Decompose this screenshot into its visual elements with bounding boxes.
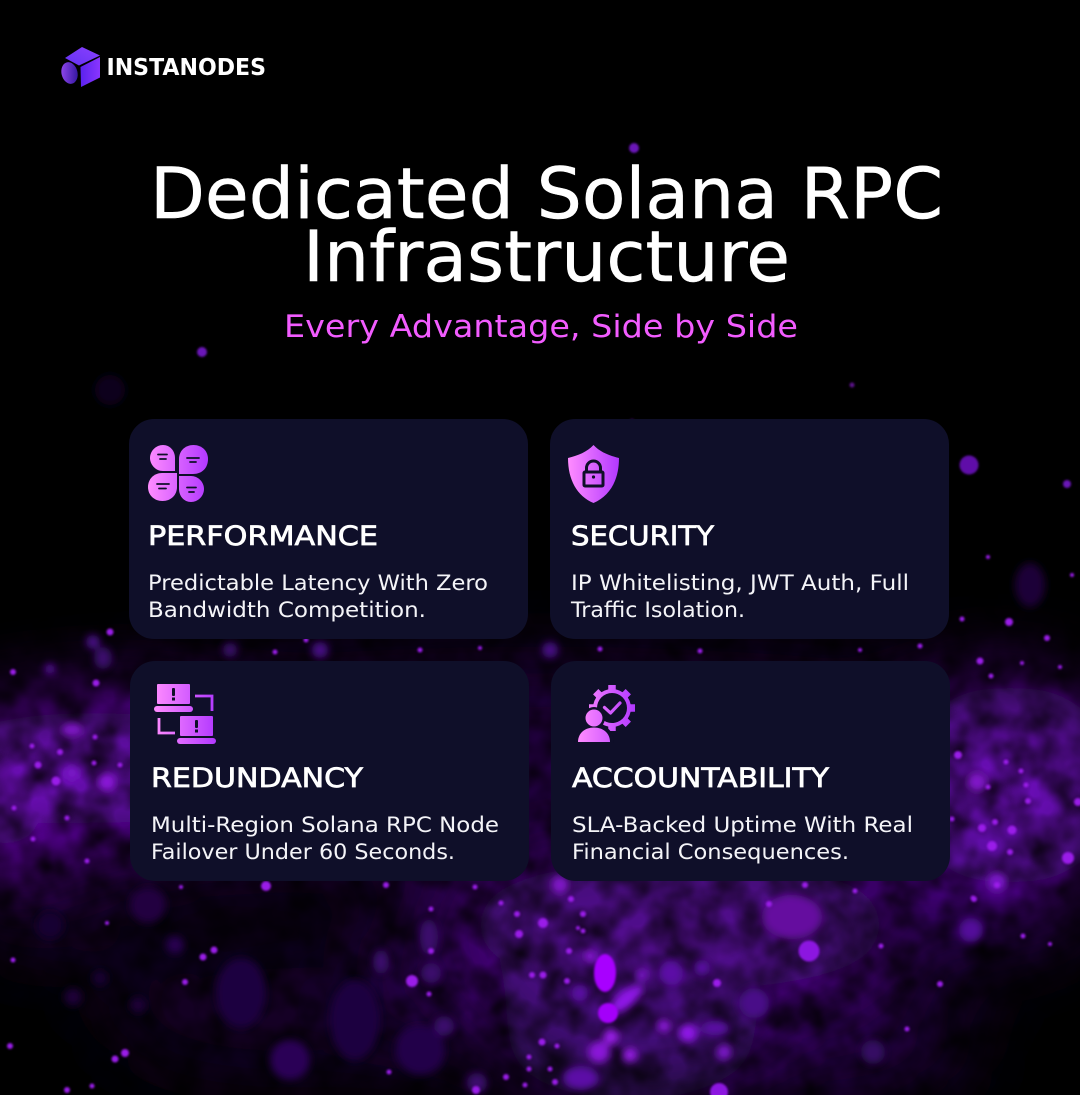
icon: shield with padlock [568,445,619,503]
icon: cube [59,47,100,87]
logo wordmark: INSTANODES [106,55,266,81]
title [150,153,943,298]
panel: performance [129,419,528,639]
small particles [7,382,1080,1094]
logo: Instanodes [59,47,266,87]
text: performance description: Predictable Latency With Zero [148,571,488,595]
text: redundancy description [151,813,499,864]
text: security description: Traffic Isolation. [570,598,745,622]
panel: security [550,419,949,639]
text: redundancy description: Multi-Region Solana RPC Node [151,813,499,837]
icon: person with gear and check [574,685,635,743]
heading: redundancy: REDUNDANCY [151,763,364,794]
panel: accountability [551,661,950,881]
icon: four petals [148,445,208,502]
text: performance description [148,571,488,622]
subtitle: Every Advantage, Side by Side [284,309,798,345]
text: security description [570,571,909,622]
text: accountability description [572,813,913,864]
nebula mottling [0,380,1080,1095]
text: redundancy description: Failover Under 60 Seconds. [151,840,455,864]
title: Dedicated Solana RPC [150,153,943,235]
icon: failover laptops [154,684,216,744]
text: accountability description: Financial Consequences. [572,840,849,864]
text: performance description: Bandwidth Competition. [148,598,426,622]
text: security description: IP Whitelisting, JWT Auth, Full [571,571,909,595]
heading: security: SECURITY [571,521,715,552]
heading: accountability: ACCOUNTABILITY [572,763,830,794]
heading: performance: PERFORMANCE [148,521,378,552]
text: accountability description: SLA-Backed Uptime With Real [572,813,913,837]
panel: redundancy [130,661,529,881]
title: Infrastructure [303,216,790,298]
soft bright orbs [197,143,1071,1095]
